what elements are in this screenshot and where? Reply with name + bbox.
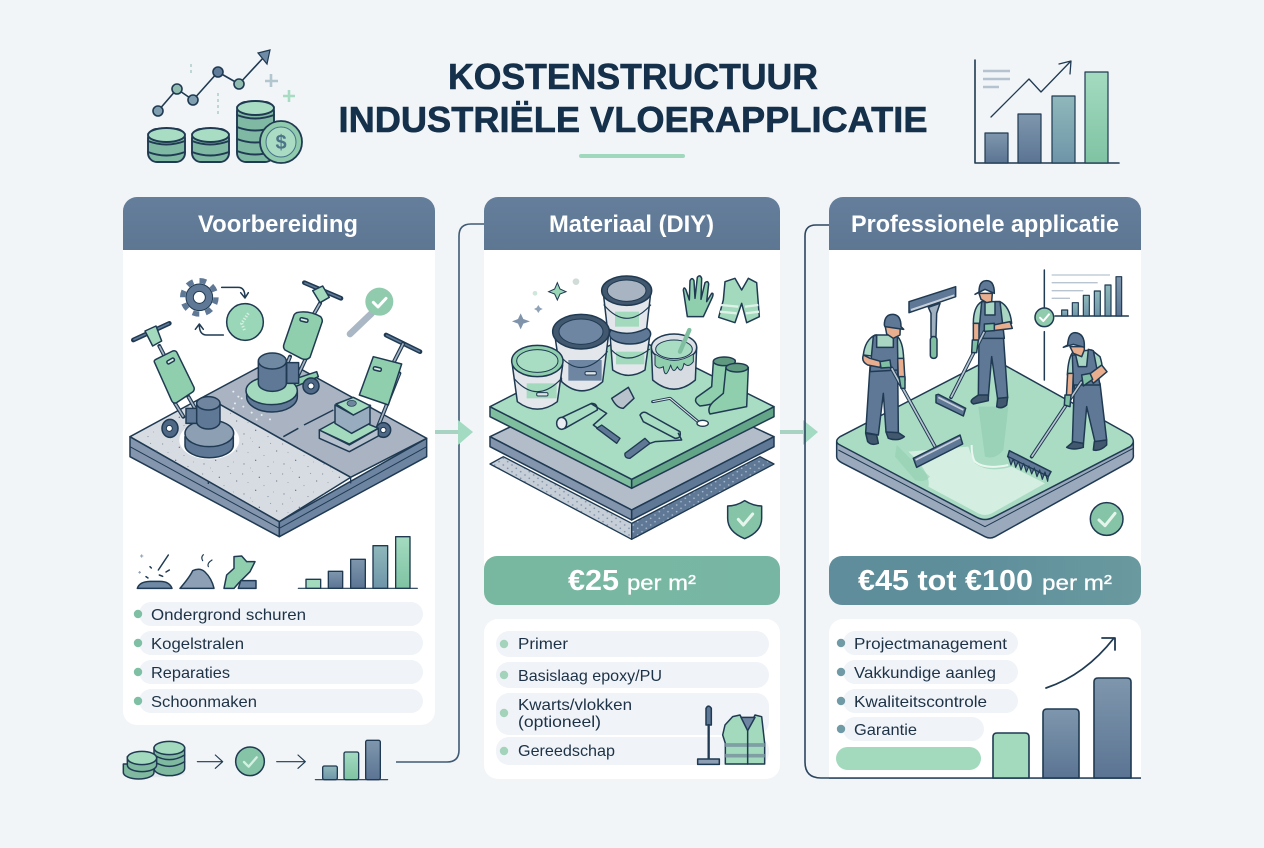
panel heading: Materiaal (DIY) xyxy=(549,211,714,238)
rising bar chart xyxy=(993,638,1131,778)
arrow: voorbereiding to materiaal xyxy=(435,420,473,445)
icon: floating squeegee xyxy=(909,287,956,358)
panel card xyxy=(123,197,435,725)
worker right xyxy=(1008,333,1107,481)
icon: sparkles xyxy=(512,278,579,329)
illustration: buckets and tools on layered floor xyxy=(490,276,774,539)
icon: check badge xyxy=(1090,503,1123,535)
panel heading xyxy=(829,197,1141,250)
icon: gear cycle xyxy=(183,281,263,340)
small tools icons and bar chart xyxy=(137,537,417,588)
list: materiaal items: (optioneel) xyxy=(518,714,601,731)
icon: paint rollers xyxy=(557,387,708,458)
bucket slate xyxy=(553,314,609,391)
grinder right xyxy=(319,335,420,452)
icon: rubble mound xyxy=(180,555,214,588)
price: professionele applicatie: per m² xyxy=(1042,572,1112,595)
title: KOSTENSTRUCTUUR xyxy=(448,56,818,97)
list: materiaal items: Gereedschap xyxy=(518,743,615,760)
icon: blasting grit xyxy=(137,554,172,588)
grinder centre xyxy=(246,283,341,412)
panel card xyxy=(829,197,1141,597)
list: materiaal items: Basislaag epoxy/PU xyxy=(518,668,662,685)
title: INDUSTRIËLE VLOERAPPLICATIE xyxy=(338,99,928,140)
list: materiaal items: Primer xyxy=(518,636,569,653)
flow strip: coins to check to bars xyxy=(122,740,388,780)
price: professionele applicatie xyxy=(829,556,1141,605)
list: voorbereiding items: Kogelstralen xyxy=(151,636,244,653)
icon: glove xyxy=(683,276,713,317)
worker left xyxy=(863,314,963,467)
list: voorbereiding items: Ondergrond schuren xyxy=(151,607,306,624)
list: voorbereiding items: Reparaties xyxy=(151,665,230,682)
title underline xyxy=(579,154,685,158)
list: materiaal items: Kwarts/vlokken xyxy=(518,697,632,714)
arrow: materiaal to professionele applicatie xyxy=(780,420,818,445)
icon: mop and vest xyxy=(698,706,765,764)
title xyxy=(338,56,928,140)
icon: repair patch xyxy=(224,556,256,588)
list: voorbereiding items xyxy=(134,602,423,713)
list: materiaal items xyxy=(484,619,780,779)
list: professionele applicatie items: Projectmanagement xyxy=(854,636,1008,653)
list: voorbereiding items: Schoonmaken xyxy=(151,694,257,711)
price: professionele applicatie: €45 tot €100 xyxy=(858,565,1033,597)
panel card xyxy=(484,197,780,597)
floor layers xyxy=(490,335,774,539)
bar chart small xyxy=(298,537,417,588)
open paint can xyxy=(651,330,697,389)
panel: voorbereiding xyxy=(123,197,435,725)
icon: shield check xyxy=(728,501,762,539)
bucket stack xyxy=(602,276,652,375)
connector: to materiaal panel xyxy=(396,224,484,762)
price: materiaal: €25 xyxy=(568,565,619,597)
icon: bar chart with arrow xyxy=(975,60,1119,163)
list: professionele applicatie items: Garantie xyxy=(854,722,917,739)
panel heading xyxy=(123,197,435,250)
panel: professionele applicatie xyxy=(829,197,1141,778)
panel heading: Voorbereiding xyxy=(198,211,358,238)
illustration: floor grinders on concrete slab xyxy=(130,281,427,537)
price: materiaal xyxy=(484,556,780,605)
icon: safety vest xyxy=(719,278,759,323)
icon: coins with rising trend line xyxy=(148,50,302,163)
connector: frame around professionele applicatie xyxy=(805,225,1141,778)
illustration: three workers applying floor coating xyxy=(837,270,1133,538)
list: professionele applicatie items: Vakkundige aanleg xyxy=(854,665,996,682)
panel heading xyxy=(484,197,780,250)
icon: magnifier check xyxy=(350,288,393,334)
icon: boots xyxy=(696,357,748,414)
list: professionele applicatie items: Kwaliteitscontrole xyxy=(854,694,987,711)
panel heading: Professionele applicatie xyxy=(851,211,1119,238)
grinder left xyxy=(133,323,239,459)
icon: coins with rising trend line: $ xyxy=(275,132,287,154)
worker centre xyxy=(936,281,1012,416)
bucket green xyxy=(512,345,563,409)
price: materiaal: per m² xyxy=(627,572,696,595)
green highlight pill xyxy=(836,747,981,770)
list: professionele applicatie items xyxy=(829,619,1141,778)
panel: materiaal xyxy=(484,197,780,779)
mini chart with check xyxy=(1035,270,1128,380)
coated slab xyxy=(837,360,1133,538)
